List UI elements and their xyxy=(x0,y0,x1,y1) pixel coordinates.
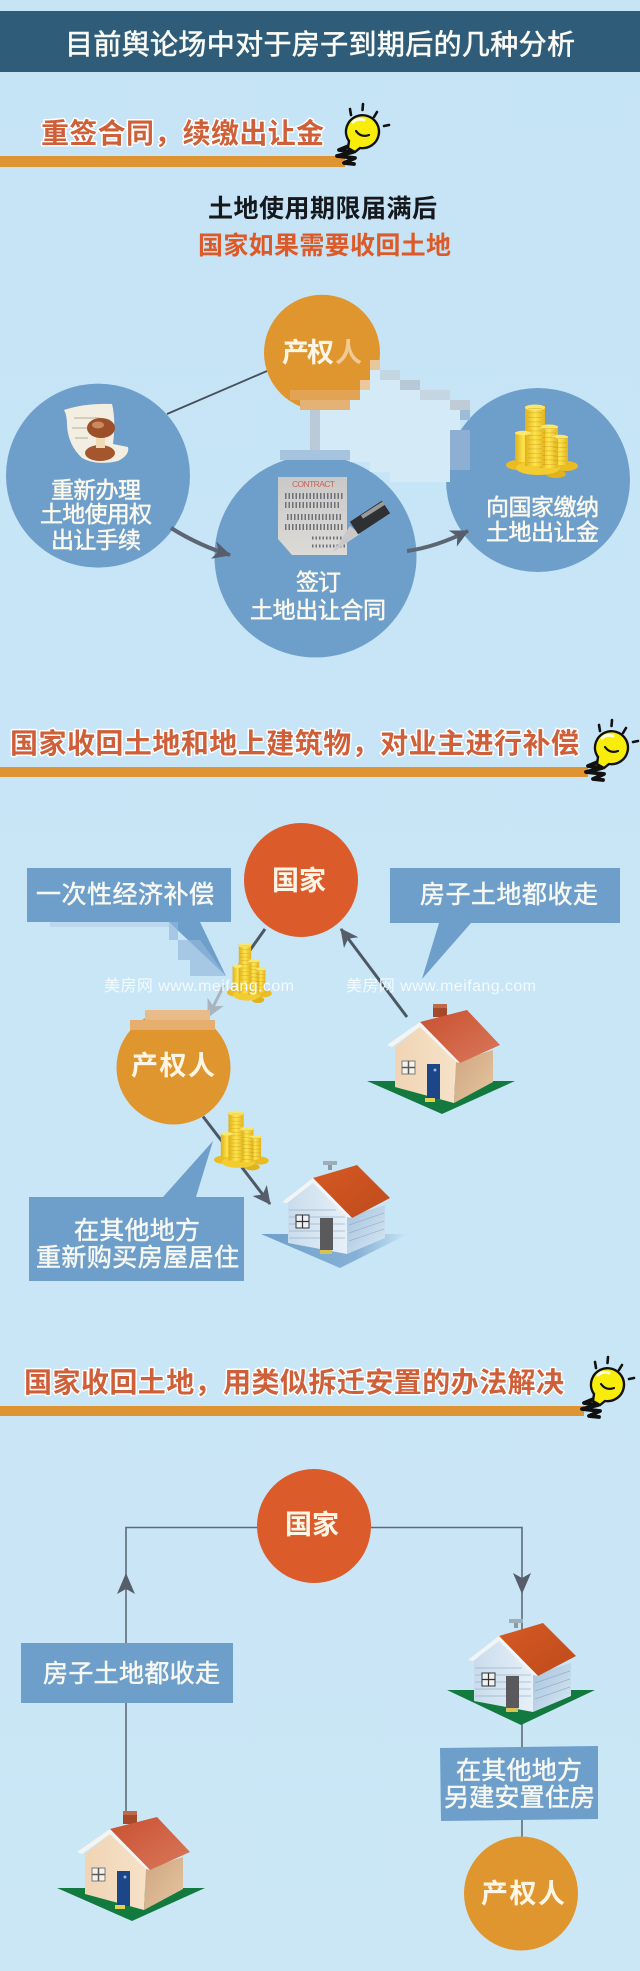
box: rebuild elsewhere: 在其他地方 xyxy=(456,1757,582,1785)
callout: buy elsewhere: 重新购买房屋居住 xyxy=(36,1244,239,1272)
section 1 heading: 重签合同，续缴出让金 xyxy=(41,118,324,149)
callout: one-off compensation: 一次性经济补偿 xyxy=(36,881,214,909)
box: rebuild elsewhere xyxy=(440,1746,598,1821)
arrow: house to state xyxy=(341,929,407,1017)
subtitle: 土地使用期限届满后 xyxy=(208,195,437,223)
circle: sign the contract xyxy=(214,455,416,657)
section 2 heading: 国家收回土地和地上建筑物，对业主进行补偿 xyxy=(10,728,579,759)
section 2 heading xyxy=(0,728,588,777)
line from property owner to step one xyxy=(167,371,267,414)
circle: property owner xyxy=(464,1836,578,1950)
icon: contract and pen: CONTRACT xyxy=(292,479,335,489)
arrow: step two to step three xyxy=(407,531,468,551)
circle: state xyxy=(244,823,358,937)
step three text: 土地出让金 xyxy=(486,519,599,545)
icon: coins on owner-house arrow xyxy=(214,1111,269,1170)
step three text xyxy=(486,494,599,545)
box: rebuild elsewhere: 另建安置住房 xyxy=(444,1784,595,1812)
step one text: 出让手续 xyxy=(51,527,141,553)
circle: state xyxy=(257,1469,371,1583)
flow lines with arrows xyxy=(117,1528,531,1846)
step two text: 土地出让合同 xyxy=(250,597,386,623)
step one text xyxy=(40,477,152,553)
circle: pay the land fee xyxy=(446,388,630,572)
house: blue house with shadow xyxy=(261,1161,408,1268)
circle: property owner: 人 xyxy=(335,338,362,368)
circle: property owner: 产权 xyxy=(282,338,334,368)
circle: state: 国家 xyxy=(272,866,326,896)
step two text xyxy=(250,569,386,623)
section 1: renew the contract xyxy=(0,104,630,657)
callout: house and land taken xyxy=(390,868,620,979)
section 3 heading: 国家收回土地，用类似拆迁安置的办法解决 xyxy=(24,1367,564,1398)
house: tan house on green ground xyxy=(57,1811,205,1921)
step three text: 向国家缴纳 xyxy=(486,494,599,520)
arrow: owner to new house xyxy=(203,1116,270,1204)
callout: one-off compensation xyxy=(27,868,231,976)
section 3 heading xyxy=(0,1367,584,1416)
icon: light bulb xyxy=(337,104,389,164)
mosaic patch: blurred area between circles xyxy=(280,360,470,482)
callout: buy elsewhere xyxy=(29,1141,244,1281)
icon: coins on state-owner arrow xyxy=(227,943,272,1003)
circle: property owner: 产权人 xyxy=(481,1879,565,1909)
circle: property owner xyxy=(116,1010,230,1124)
circle: re-apply land use rights xyxy=(6,384,190,568)
section 1 heading xyxy=(0,118,345,167)
arrow: step one to step two xyxy=(171,528,230,555)
title bar xyxy=(0,11,640,72)
box: house and land taken xyxy=(21,1643,233,1703)
subtitle: 国家如果需要收回土地 xyxy=(198,232,451,260)
icon: stack of coins xyxy=(506,404,578,478)
circle: property owner: 产权人 xyxy=(131,1051,215,1081)
callout: house and land taken: 房子土地都收走 xyxy=(420,881,598,909)
house: blue house on green ground xyxy=(447,1619,595,1725)
icon: light bulb xyxy=(586,720,638,780)
subtitle xyxy=(198,195,451,260)
callout: buy elsewhere: 在其他地方 xyxy=(74,1217,200,1245)
house: tan house xyxy=(367,1004,515,1114)
watermark left: 美房网 www.meifang.com xyxy=(104,977,294,995)
icon: light bulb xyxy=(582,1357,634,1417)
icon: scroll and seal xyxy=(64,404,128,463)
section 3: relocation xyxy=(0,1357,634,1950)
arrow: state to owner xyxy=(208,929,265,1017)
circle: property owner xyxy=(264,295,380,411)
step two text: 签订 xyxy=(296,569,341,595)
step one text: 土地使用权 xyxy=(40,501,152,527)
step one text: 重新办理 xyxy=(51,477,141,503)
box: house and land taken: 房子土地都收走 xyxy=(43,1660,220,1688)
circle: state: 国家 xyxy=(285,1510,339,1540)
watermark right: 美房网 www.meifang.com xyxy=(346,977,536,995)
icon: contract and pen xyxy=(278,477,386,555)
title bar: 目前舆论场中对于房子到期后的几种分析 xyxy=(65,29,575,60)
section 2: state reclaims and compensates xyxy=(0,720,638,1281)
